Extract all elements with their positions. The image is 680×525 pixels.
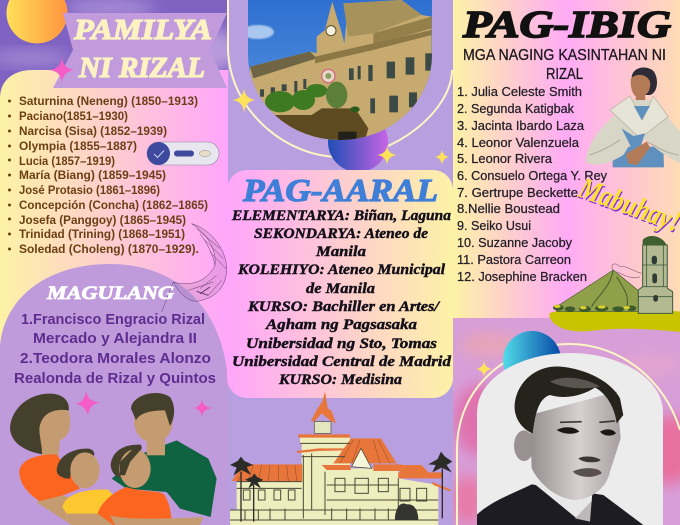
text block: education history: KURSO: Medisina — [278, 372, 403, 388]
text block: list of siblings: José Protasio (1861–1896) — [19, 185, 160, 197]
text block: education history: Agham ng Pagsasaka — [265, 317, 418, 333]
decorative: cream ring — [228, 0, 452, 157]
heading: Pag-ibig: PAG-IBIG — [462, 4, 672, 46]
panel: family cloudy sky background — [0, 0, 228, 96]
text block: list of sweethearts: 6. Consuelo Ortega Y. Rey — [457, 169, 608, 183]
text block: parents names: Realonda de Rizal y Quintos — [14, 370, 216, 387]
photo: University of Santo Tomas building — [242, 0, 432, 140]
text block: list of siblings: Narcisa (Sisa) (1852–1939) — [19, 126, 167, 138]
text block: list of siblings: Trinidad (Trining) (1868–1951) — [19, 229, 185, 241]
icon: cyan-blue circle — [503, 331, 561, 389]
illustration: volcano and bell tower — [549, 236, 680, 333]
text block: list of sweethearts: 2. Segunda Katigbak — [457, 102, 575, 116]
icon: blue-purple circle — [328, 112, 388, 172]
icon: toggle widget — [147, 142, 219, 165]
text block: education history: de Manila — [306, 281, 376, 297]
text block: education history: SEKONDARYA: Ateneo de — [254, 226, 428, 242]
text block: parents names: 2.Teodora Morales Alonzo — [20, 350, 211, 367]
text block: education history: KOLEHIYO: Ateneo Municipal — [237, 262, 446, 278]
text block: education history — [231, 208, 452, 388]
text block: list of siblings: Concepción (Concha) (1862–1865) — [19, 200, 208, 212]
text block: education history: Manila — [315, 244, 367, 260]
illustration: woman in Filipiniana — [586, 67, 680, 167]
panel: portrait pink sky background — [452, 318, 680, 525]
text block: list of sweethearts: 3. Jacinta Ibardo Laza — [457, 119, 584, 133]
text block: education history: KURSO: Bachiller en Artes/ — [247, 299, 441, 315]
heading: Magulang: MAGULANG — [46, 283, 174, 304]
icon: feather — [162, 224, 227, 312]
text block: education history: Unibersidad ng Sto, Tomas — [246, 336, 437, 352]
icon: gold sparkles — [232, 88, 449, 165]
text block: list of sweethearts: 9. Seiko Usui — [457, 219, 531, 233]
text block: list of siblings: María (Biang) (1859–1945) — [19, 170, 166, 182]
icon: pink sparkles — [76, 391, 212, 417]
text block: list of sweethearts: 7. Gertrupe Beckette — [457, 186, 578, 200]
text block: subtitle — [463, 47, 666, 83]
icon: sun circle — [6, 0, 68, 44]
photo: portrait of Jose Rizal — [477, 353, 663, 525]
title: Pamilya ni Rizal — [73, 14, 212, 84]
text block: parents names: Mercado y Alejandra II — [33, 330, 197, 347]
panel: love card background — [453, 0, 680, 318]
icon: pink sparkle — [49, 57, 75, 83]
decorative: ground blob overlap — [550, 318, 680, 332]
text block: list of sweethearts: 11. Pastora Carreon — [457, 253, 571, 267]
title: Pamilya ni Rizal: NI RIZAL — [78, 53, 205, 84]
text block: list of siblings: Josefa (Panggoy) (1865–1945) — [19, 215, 186, 227]
decorative: cream arch ring — [457, 344, 680, 525]
heading: Pag-aaral: PAG-AARAL — [242, 172, 438, 208]
text block: list of siblings: Olympia (1855–1887) — [19, 141, 137, 153]
panel: schooling card — [227, 170, 453, 398]
text block: list of sweethearts: 12. Josephine Bracken — [457, 270, 587, 284]
text block: parents names: 1.Francisco Engracio Rizal — [21, 311, 205, 328]
text block: list of sweethearts: 1. Julia Celeste Smith — [457, 85, 582, 99]
text block: education history: Unibersidad Central de Madrid — [232, 354, 452, 370]
text block: list of siblings: Soledad (Choleng) (1870–1929). — [19, 244, 199, 256]
illustration: family — [10, 393, 217, 525]
text block: education history: ELEMENTARYA: Biñan, Laguna — [231, 208, 452, 224]
text block: list of siblings — [8, 96, 208, 256]
text block: list of siblings: Saturnina (Neneng) (1850–1913) — [19, 96, 198, 108]
panel: center background — [226, 0, 454, 525]
text block: list of siblings: Lucia (1857–1919) — [19, 156, 115, 168]
text block: list of sweethearts: 8.Nellie Boustead — [457, 202, 560, 216]
icon: gold sparkle — [476, 361, 492, 377]
title: Pamilya ni Rizal: PAMILYA — [73, 14, 212, 46]
illustration: heritage mansion — [230, 392, 452, 525]
banner: family title ribbon — [53, 13, 227, 88]
panel: family list background — [0, 70, 228, 525]
panel: parents arch — [0, 264, 228, 525]
text block: list of sweethearts: 4. Leonor Valenzuela — [457, 136, 579, 150]
text block: list of sweethearts: 10. Suzanne Jacoby — [457, 236, 573, 250]
text block: list of siblings: Paciano(1851–1930) — [19, 111, 128, 123]
text block: subtitle: RIZAL — [546, 66, 583, 83]
text block: list of sweethearts — [457, 85, 608, 284]
text block: subtitle: MGA NAGING KASINTAHAN NI — [463, 47, 666, 64]
text block: list of sweethearts: 5. Leonor Rivera — [457, 152, 552, 166]
text block: parents names — [14, 311, 216, 387]
